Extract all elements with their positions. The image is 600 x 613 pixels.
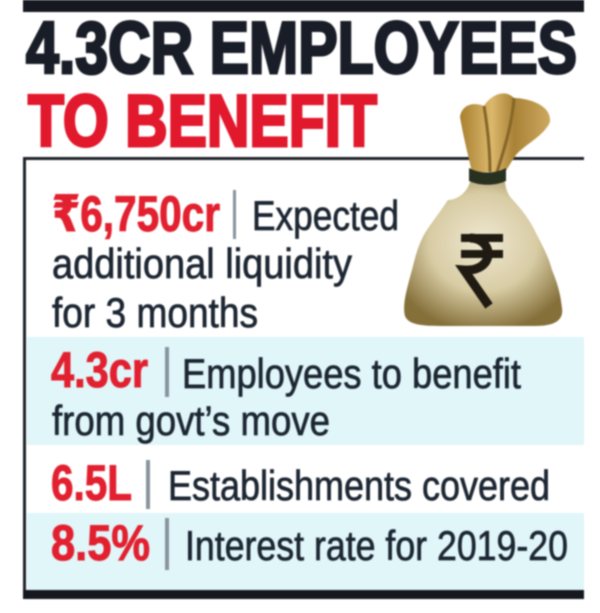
bag body — [404, 182, 562, 326]
description: Expected — [252, 192, 399, 239]
divider — [165, 518, 169, 570]
bag folds — [484, 98, 514, 172]
bottom bar — [23, 590, 584, 599]
band: employees row — [27, 337, 584, 445]
description: Employees to benefit — [182, 350, 521, 397]
row: establishments — [51, 455, 550, 511]
value: 6.5L: 6.5L — [51, 455, 132, 511]
value: 8.5%: 8.5% — [51, 515, 150, 571]
rupee symbol on bag — [461, 238, 503, 306]
bag neck — [460, 93, 550, 172]
divider — [165, 347, 169, 397]
top bar — [23, 0, 584, 12]
description line 2: from govt’s move — [52, 397, 330, 444]
value: 6,750cr: ₹6,750cr — [52, 186, 220, 242]
title — [26, 8, 577, 162]
band: interest row — [27, 513, 584, 590]
panel frame — [24, 158, 584, 592]
description line 2: additional liquidity — [52, 240, 352, 287]
divider — [233, 190, 236, 239]
icon: money bag — [404, 93, 562, 326]
row: employees — [51, 342, 521, 444]
bag tie — [469, 168, 506, 185]
divider — [146, 460, 150, 509]
value: 4.3cr: 4.3cr — [51, 342, 148, 398]
title line 2: TO BENEFIT — [28, 81, 377, 162]
row: liquidity — [52, 186, 399, 336]
description line 3: for 3 months — [52, 289, 258, 336]
row: interest rate — [51, 515, 568, 571]
